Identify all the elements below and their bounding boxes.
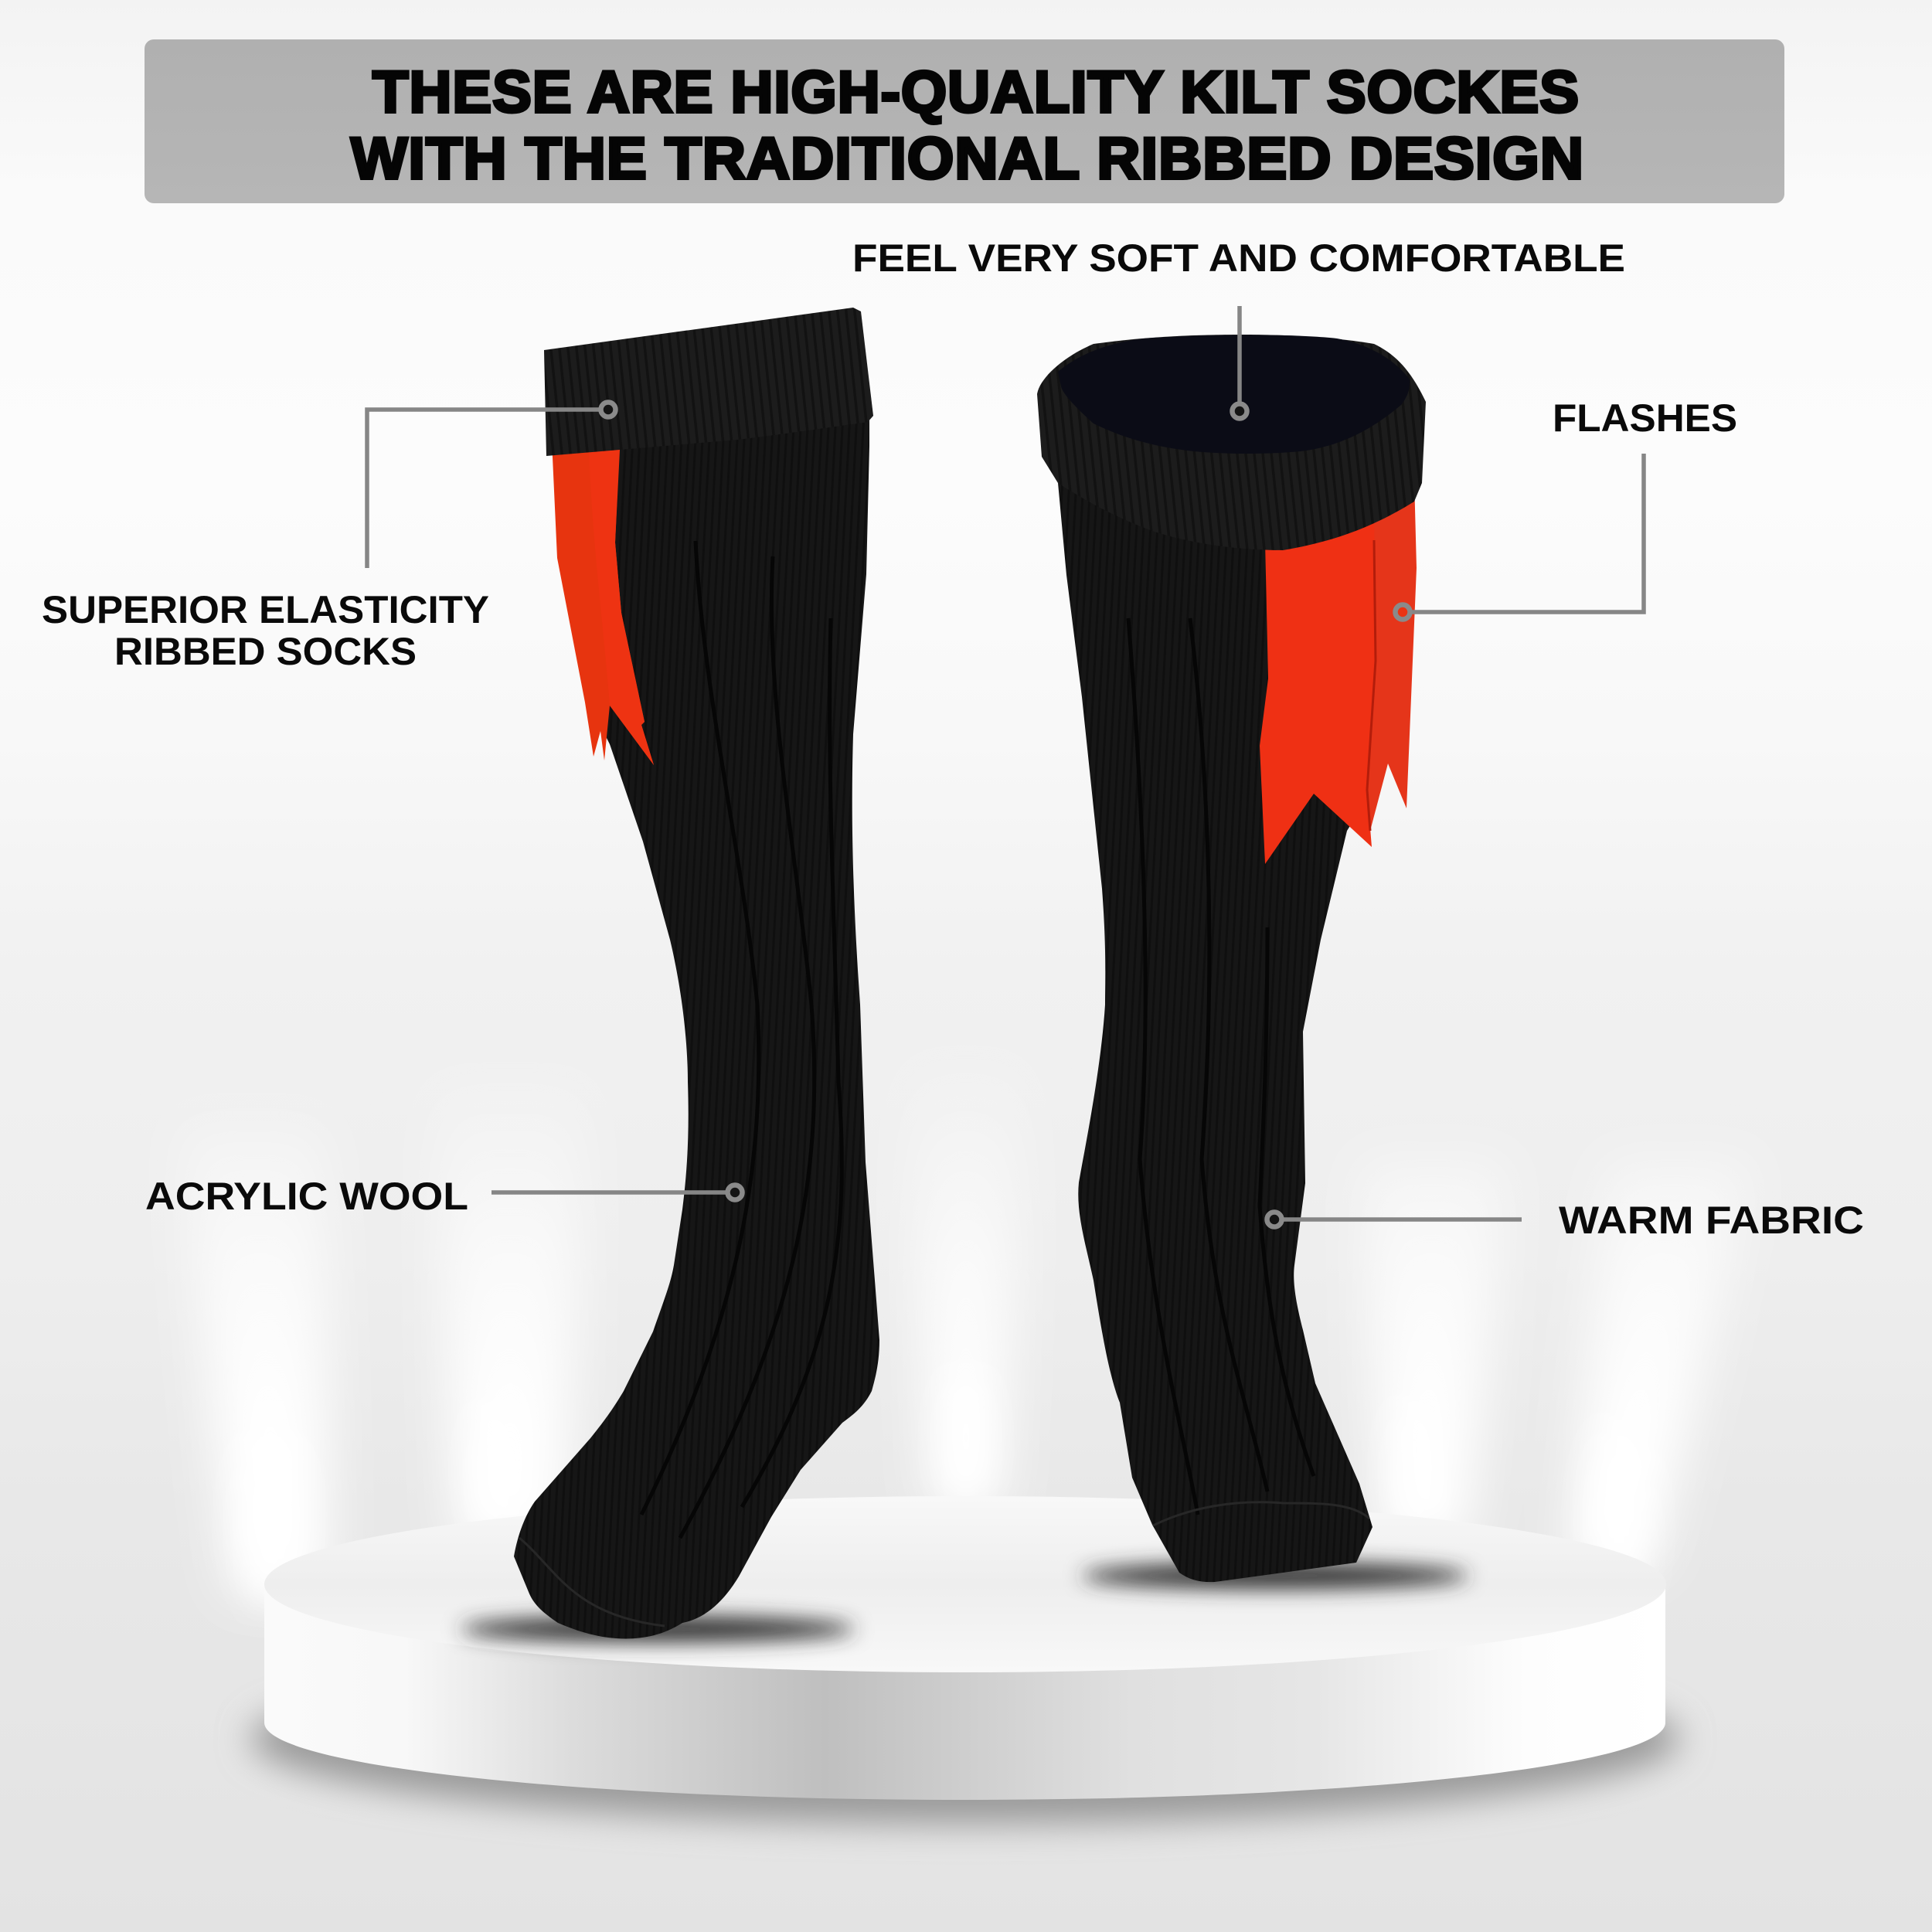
right flash front ribbon: [1260, 510, 1376, 864]
header banner: [145, 39, 1784, 203]
callout: flashes: FLASHES: [1553, 396, 1737, 440]
right sock cuff: [1037, 335, 1426, 550]
callout: superior elasticity ribbed socks: SUPERIOR ELASTICITY: [42, 588, 489, 631]
callout: feel very soft and comfortable: FEEL VERY SOFT AND COMFORTABLE: [852, 236, 1625, 280]
podium top: [264, 1496, 1666, 1672]
callout: acrylic wool: [145, 1175, 742, 1218]
callout: acrylic wool: ACRYLIC WOOL: [145, 1175, 468, 1218]
right sock: [1037, 335, 1426, 1582]
callout: flashes: [1396, 396, 1737, 620]
left flash fold: [589, 440, 654, 765]
callout: superior elasticity ribbed socks: [42, 402, 615, 673]
left sock body: [514, 402, 879, 1638]
sock opening: [1058, 335, 1410, 454]
podium side: [264, 1584, 1665, 1800]
callout: feel very soft and comfortable: [852, 236, 1625, 419]
left sock: [514, 308, 879, 1638]
title line 1: THESE ARE HIGH-QUALITY KILT SOCKES: [372, 60, 1580, 125]
right sock body: [1058, 483, 1391, 1582]
left sock cuff: [544, 308, 873, 456]
callout: warm fabric: [1267, 1199, 1864, 1242]
foot shadow left: [461, 1616, 855, 1642]
foot shadow right: [1082, 1563, 1468, 1589]
title line 2: WITH THE TRADITIONAL RIBBED DESIGN: [351, 126, 1584, 192]
callout: superior elasticity ribbed socks: RIBBED SOCKS: [114, 630, 417, 673]
podium: [250, 1496, 1680, 1824]
left flash: [552, 433, 654, 765]
right flash back ribbon: [1362, 479, 1417, 831]
flash seam: [1367, 540, 1376, 831]
callout: warm fabric: WARM FABRIC: [1559, 1199, 1864, 1242]
